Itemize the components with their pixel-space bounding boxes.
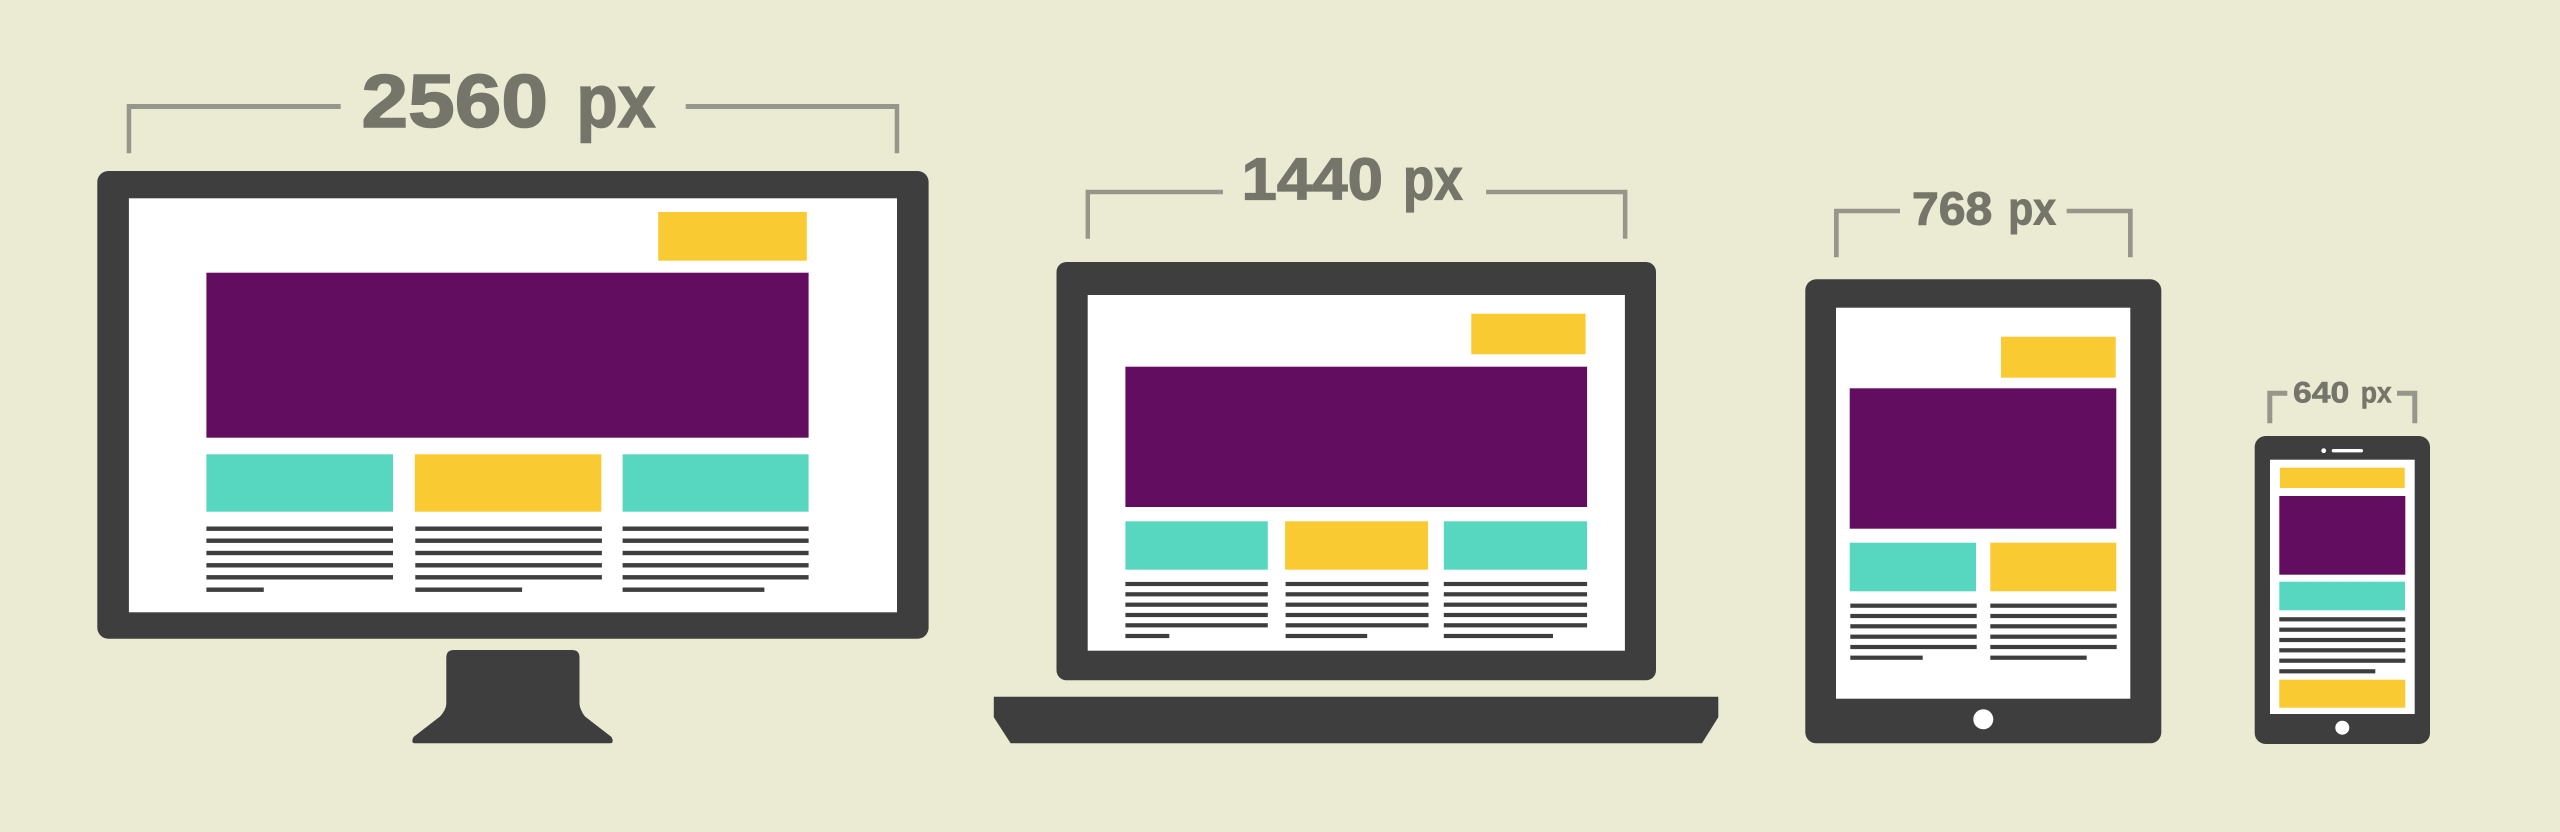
phone screen (2270, 460, 2415, 714)
width label: 640 px: px (2361, 377, 2392, 410)
laptop content blocks (1125, 521, 1587, 570)
phone camera (2321, 448, 2326, 453)
laptop text lines (1125, 582, 1587, 638)
laptop hero block (1125, 367, 1587, 507)
desktop content blocks (206, 454, 809, 512)
monitor body (97, 171, 929, 639)
tablet hero block (1850, 388, 2116, 529)
width label: 2560 px: px (576, 59, 656, 143)
width label: 1440 px: px (1403, 146, 1463, 212)
panel: phone (2255, 377, 2430, 744)
phone body (2255, 436, 2430, 744)
laptop header block (1471, 314, 1586, 354)
bracket: laptop width (1086, 190, 1627, 239)
panel: laptop (994, 146, 1718, 743)
phone home button (2335, 721, 2349, 735)
panel: desktop monitor (97, 59, 929, 743)
bracket: tablet width (1834, 209, 2133, 257)
laptop screen (1088, 295, 1625, 651)
tablet text lines (1850, 604, 2117, 660)
laptop base (994, 697, 1718, 743)
tablet home button (1973, 709, 1993, 729)
width label: 768 px: px (2008, 182, 2056, 234)
phone text lines (2279, 617, 2405, 673)
tablet screen (1836, 308, 2130, 699)
phone speaker (2332, 449, 2363, 452)
desktop header block (658, 212, 807, 261)
bracket: desktop width (127, 104, 899, 153)
desktop hero block (206, 273, 809, 438)
panel: tablet (1805, 182, 2161, 743)
laptop lid (1056, 262, 1656, 680)
width label: 768 px: 768 (1912, 182, 1992, 234)
desktop text lines (206, 526, 809, 592)
tablet body (1805, 279, 2161, 743)
width label: 1440 px: 1440 (1242, 146, 1383, 212)
width label: 2560 px: 2560 (362, 59, 548, 143)
monitor stand (412, 650, 613, 743)
phone hero block (2279, 496, 2405, 575)
monitor screen (129, 198, 897, 612)
phone top block (2280, 468, 2405, 488)
width label: 640 px: 640 (2293, 377, 2349, 410)
bracket: phone width (2267, 391, 2417, 423)
tablet header block (2001, 337, 2116, 378)
tablet content blocks (1850, 543, 2116, 591)
phone content block (2279, 582, 2405, 610)
phone bottom block (2279, 680, 2405, 708)
